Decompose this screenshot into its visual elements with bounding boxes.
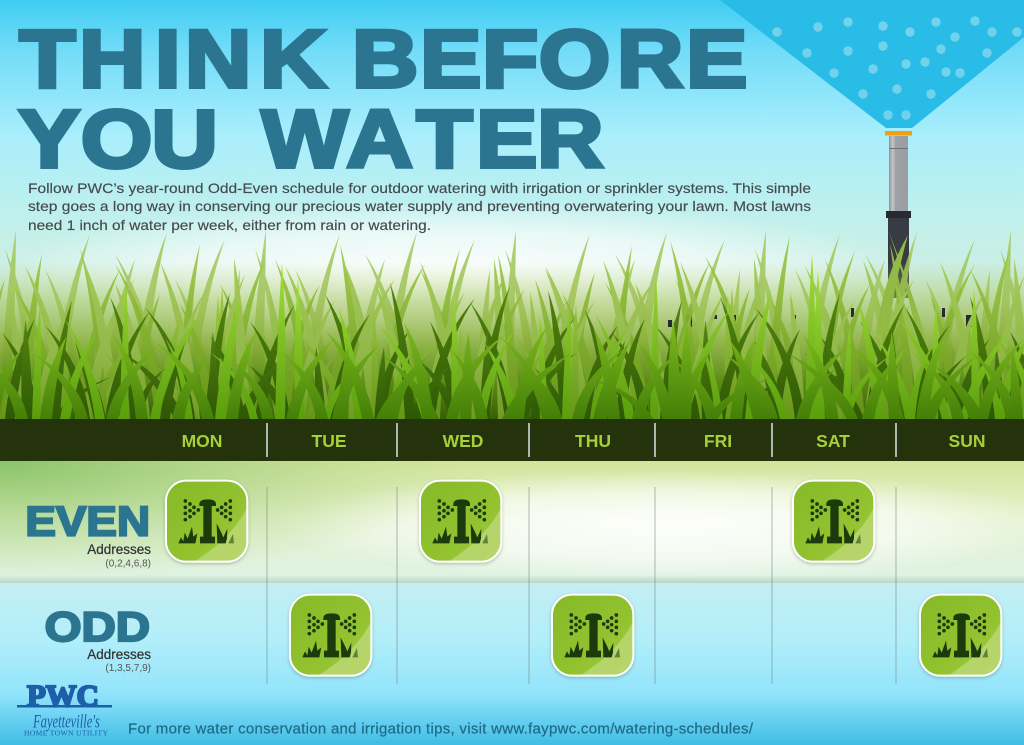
day header bar: MON: [182, 431, 222, 451]
day header bar: THU: [575, 431, 611, 451]
odd addresses label: ODD: [45, 604, 150, 650]
intro paragraph: step goes a long way in conserving our precious water supply and preventing overwatering your lawn. Most lawns: [28, 199, 811, 214]
sprinkler illustration: [720, 0, 1024, 298]
day header bar: SAT: [816, 431, 850, 451]
icon: sprinkler Tuesday odd: [290, 595, 372, 677]
icon: sprinkler Saturday even: [793, 481, 875, 563]
day header bar: FRI: [704, 431, 732, 451]
title: THINK BEFORE: [2, 14, 747, 105]
table background: even row: [0, 461, 1024, 583]
title: YOU WATER: [2, 94, 603, 185]
icon: sprinkler Thursday odd: [552, 595, 634, 677]
column grid lines: [267, 487, 896, 684]
PWC logo: HOME TOWN UTILITY: [24, 728, 109, 738]
even addresses label: (0,2,4,6,8): [105, 558, 151, 570]
intro paragraph: need 1 inch of water per week, either from rain or watering.: [28, 218, 431, 233]
even addresses label: [25, 498, 151, 570]
icon: sprinkler Wednesday even: [420, 481, 502, 563]
PWC logo: Fayetteville's: [32, 712, 100, 732]
PWC logo: [17, 679, 112, 738]
day header bar: SUN: [949, 431, 985, 451]
intro paragraph: Follow PWC’s year-round Odd-Even schedule for outdoor watering with irrigation or sprinkler systems. This simple: [28, 181, 811, 196]
title: [2, 14, 747, 185]
odd addresses label: [45, 604, 151, 674]
day header bar: [0, 419, 1024, 461]
icon: sprinkler Monday even: [166, 481, 248, 563]
odd addresses label: Addresses: [87, 647, 151, 662]
day header bar: TUE: [312, 431, 346, 451]
sky background: [0, 0, 1024, 420]
even addresses label: EVEN: [25, 498, 150, 545]
sprinkler body: [885, 131, 912, 298]
day header bar: WED: [443, 431, 483, 451]
water spray cone: [720, 0, 1024, 128]
odd addresses label: (1,3,5,7,9): [105, 663, 151, 674]
table background: odd row: [0, 583, 1024, 745]
icon: sprinkler Sunday odd: [920, 595, 1002, 677]
footer text: For more water conservation and irrigation tips, visit www.faypwc.com/watering-schedules/: [128, 720, 754, 738]
even addresses label: Addresses: [87, 542, 151, 557]
intro paragraph: [28, 181, 811, 233]
PWC logo: PWC: [27, 679, 99, 713]
grass: [0, 230, 1024, 419]
